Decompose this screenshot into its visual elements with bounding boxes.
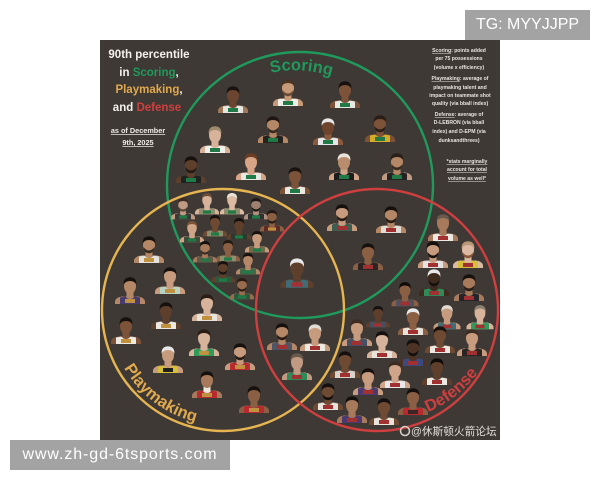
player — [453, 241, 483, 268]
player — [425, 326, 455, 353]
title: Playmaking, — [115, 84, 183, 96]
players: playmaking — [111, 236, 269, 413]
definitions: D-LEBRON (via bball — [434, 120, 485, 126]
title: in Scoring, — [119, 67, 179, 79]
player — [457, 329, 487, 356]
player — [330, 351, 360, 378]
player — [200, 126, 230, 153]
definitions: impact on teammate shot — [429, 93, 491, 99]
definitions: Defense: average of — [435, 112, 484, 118]
player — [189, 329, 219, 356]
player — [153, 346, 183, 373]
definitions: playmaking talent and — [433, 85, 487, 91]
player — [398, 308, 428, 335]
player — [330, 81, 360, 108]
center player: all three categories — [280, 258, 314, 288]
player — [342, 319, 372, 346]
player — [195, 193, 219, 214]
player — [267, 323, 297, 350]
player — [313, 118, 343, 145]
player — [192, 371, 222, 398]
player — [111, 317, 141, 344]
date note: as of December — [111, 126, 165, 135]
player — [227, 218, 251, 239]
player — [380, 361, 410, 388]
definitions: per 75 possessions — [435, 56, 483, 62]
player — [258, 116, 288, 143]
definitions: account for total — [447, 167, 488, 173]
playmaking circle — [102, 189, 344, 431]
player — [376, 206, 406, 233]
player — [329, 153, 359, 180]
watermark box: website: www.zh-gd-6tsports.com — [23, 446, 217, 463]
player — [353, 368, 383, 395]
player — [365, 115, 395, 142]
player — [236, 153, 266, 180]
player — [239, 386, 269, 413]
watermark box: telegram: TG: MYYJJPP — [476, 16, 579, 33]
player — [313, 383, 343, 410]
player — [245, 231, 269, 252]
player — [134, 236, 164, 263]
background panel — [100, 40, 500, 440]
player — [369, 398, 399, 425]
player — [337, 396, 367, 423]
player — [382, 153, 412, 180]
player — [225, 343, 255, 370]
player — [218, 86, 248, 113]
definitions: Playmaking: average of — [432, 76, 489, 82]
player — [203, 215, 227, 236]
definitions: (volume x efficiency) — [434, 65, 484, 71]
player — [180, 221, 204, 242]
player — [282, 353, 312, 380]
players: scoring and defense — [327, 204, 406, 270]
players: defense and playmaking-defense — [267, 214, 494, 425]
player — [398, 388, 428, 415]
definitions: index) and D-EPM (via — [432, 129, 486, 135]
definitions: *stats marginally — [447, 159, 488, 165]
player — [434, 305, 460, 329]
watermark box: telegram — [465, 10, 590, 40]
player — [367, 331, 397, 358]
player — [211, 261, 235, 282]
player — [428, 214, 458, 241]
date note: 9th, 2025 — [122, 138, 154, 147]
players: scoring — [176, 79, 412, 194]
definitions — [429, 48, 491, 182]
watermark box: website — [10, 440, 230, 470]
defense circle — [256, 189, 498, 431]
definitions: dunksandthrees) — [438, 138, 480, 144]
player — [466, 305, 494, 329]
player — [115, 277, 145, 304]
title — [108, 49, 190, 114]
player — [230, 278, 254, 299]
player — [273, 79, 303, 106]
date note — [111, 126, 165, 147]
heading: scoring: Scoring — [270, 59, 333, 78]
player — [236, 253, 260, 274]
title: 90th percentile — [108, 49, 190, 61]
weibo watermark: @休斯顿火箭论坛 — [411, 425, 497, 438]
player — [419, 269, 449, 296]
definitions: quality (via bball index) — [432, 101, 488, 107]
player — [418, 241, 448, 268]
player — [260, 210, 284, 231]
player — [176, 156, 206, 183]
player — [244, 198, 268, 219]
player — [216, 240, 240, 261]
player — [353, 243, 383, 270]
player — [220, 193, 244, 214]
definitions: Scoring: points added — [432, 48, 486, 54]
heading: playmaking: Playmaking — [124, 362, 197, 424]
player — [366, 306, 390, 327]
player — [422, 358, 452, 385]
player — [151, 302, 181, 329]
heading: defense: Defense — [424, 369, 476, 412]
player — [454, 274, 484, 301]
player — [155, 267, 185, 294]
scoring circle — [167, 52, 433, 318]
player — [193, 241, 217, 262]
player — [392, 282, 418, 306]
player — [280, 167, 310, 194]
definitions: volume as well* — [448, 176, 486, 182]
player — [192, 294, 222, 321]
player — [398, 339, 428, 366]
player — [300, 324, 330, 351]
player — [327, 204, 357, 231]
players: scoring and playmaking — [171, 193, 284, 299]
player — [171, 198, 195, 219]
title: and Defense — [113, 102, 181, 114]
